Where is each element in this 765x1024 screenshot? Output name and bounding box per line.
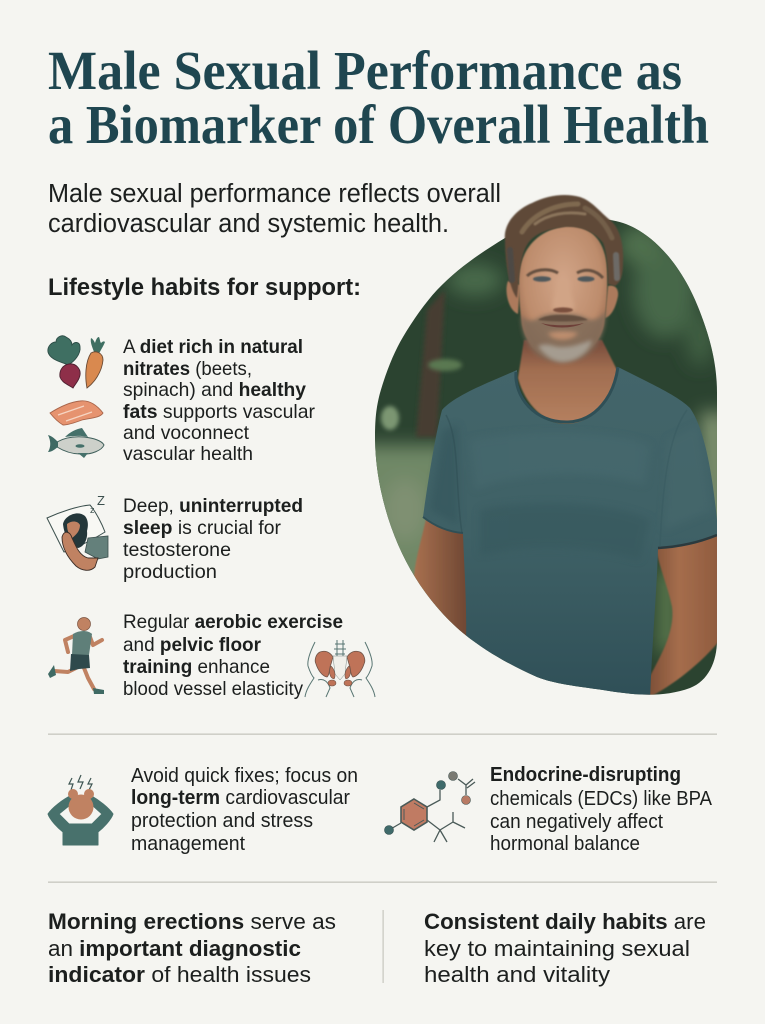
text: sleep: testosterone — [123, 539, 231, 561]
hands — [68, 789, 78, 799]
text: diet: A diet rich in natural — [123, 336, 303, 358]
head — [68, 794, 94, 820]
text: morning erections: indicator of health issues — [48, 962, 311, 987]
icon: pelvis — [305, 640, 375, 697]
icon: sleeping man — [47, 493, 108, 570]
torso — [72, 631, 92, 655]
left arm — [414, 520, 470, 639]
beet — [48, 336, 80, 388]
text: avoid quick fixes: protection and stress — [131, 810, 313, 832]
shorts — [70, 654, 90, 671]
text: morning erections: Morning erections serve as — [48, 909, 336, 934]
text: consistent habits: key to maintaining sexual — [424, 936, 690, 961]
ears — [506, 281, 520, 314]
text: sleep: Deep, uninterrupted — [123, 495, 303, 517]
foliage near left edge — [381, 406, 399, 430]
pillow — [47, 505, 105, 552]
text: endocrine disruptors — [490, 764, 713, 855]
tree trunk — [416, 290, 445, 437]
text: avoid quick fixes — [131, 765, 358, 855]
divider — [48, 734, 717, 735]
vertical divider — [382, 910, 384, 983]
text: exercise: Regular aerobic exercise — [123, 611, 343, 633]
hair highlights — [510, 204, 617, 280]
intro text — [48, 180, 501, 238]
text: sleep: sleep is crucial for — [123, 517, 281, 539]
right arm — [643, 536, 717, 695]
intro text: Male sexual performance reflects overall — [48, 180, 501, 208]
icon: vegetables — [48, 336, 105, 458]
eyes and brows — [527, 270, 603, 282]
text: consistent habits — [424, 909, 706, 987]
text: consistent habits: Consistent daily habits are — [424, 909, 706, 934]
outer bones — [305, 640, 375, 697]
text: diet: vascular health — [123, 443, 253, 465]
portrait photo — [355, 195, 728, 705]
head — [63, 513, 88, 548]
nose — [552, 280, 575, 312]
text: endocrine disruptors: Endocrine-disrupting — [490, 764, 681, 786]
text: diet: and voconnect — [123, 422, 250, 444]
divider — [48, 882, 717, 883]
shirt — [85, 536, 108, 559]
shoes — [48, 665, 56, 678]
salmon — [50, 401, 103, 425]
arm — [62, 532, 98, 570]
lightning marks — [69, 775, 92, 790]
text: diet: spinach) and healthy — [123, 379, 306, 401]
text: diet: fats supports vascular — [123, 401, 315, 423]
icon: stressed person — [48, 775, 113, 845]
text: endocrine disruptors: can negatively affect — [490, 811, 663, 833]
sacrum — [333, 656, 347, 680]
heading: lifestyle habits: Lifestyle habits for support: — [48, 274, 361, 301]
text: exercise: training enhance — [123, 656, 270, 678]
limbs — [54, 636, 102, 689]
text: avoid quick fixes: long-term cardiovascular — [131, 787, 350, 809]
text: exercise: blood vessel elasticity — [123, 678, 303, 700]
neck — [518, 340, 618, 424]
text: endocrine disruptors: hormonal balance — [490, 833, 640, 855]
beard — [521, 310, 606, 362]
text: diet: nitrates (beets, — [123, 358, 252, 380]
text: diet — [123, 336, 315, 465]
carrot — [86, 337, 105, 388]
text: exercise — [123, 611, 343, 700]
text: sleep — [123, 495, 303, 583]
icon: molecule — [384, 772, 475, 842]
photo background: forest — [375, 220, 717, 695]
text: morning erections: an important diagnostic — [48, 936, 301, 961]
text: consistent habits: health and vitality — [424, 962, 611, 987]
fish — [57, 437, 104, 454]
text: sleep: production — [123, 561, 217, 583]
text: avoid quick fixes: management — [131, 833, 245, 855]
text: avoid quick fixes: Avoid quick fixes; focus on — [131, 765, 358, 787]
title: a Biomarker of Overall Health — [48, 94, 709, 155]
icon: runner — [48, 618, 104, 694]
icon: sleeping man: Z — [97, 493, 105, 508]
face — [519, 226, 607, 362]
hair — [505, 195, 623, 298]
title — [48, 40, 709, 155]
text: endocrine disruptors: chemicals (EDCs) like BPA — [490, 788, 713, 810]
title: Male Sexual Performance as — [48, 40, 682, 101]
photo figure: arms and shirt — [414, 340, 720, 702]
zzz: z — [90, 505, 95, 515]
iliac wings — [315, 651, 333, 677]
t-shirt — [423, 367, 717, 702]
mouth — [541, 323, 584, 328]
text: exercise: and pelvic floor — [123, 634, 261, 656]
pelvic floor muscles — [330, 666, 350, 679]
text: morning erections — [48, 909, 336, 987]
intro text: cardiovascular and systemic health. — [48, 210, 449, 238]
photo figure: head — [505, 195, 623, 362]
arms and torso — [48, 795, 113, 845]
collar and sleeve hems — [423, 367, 717, 548]
